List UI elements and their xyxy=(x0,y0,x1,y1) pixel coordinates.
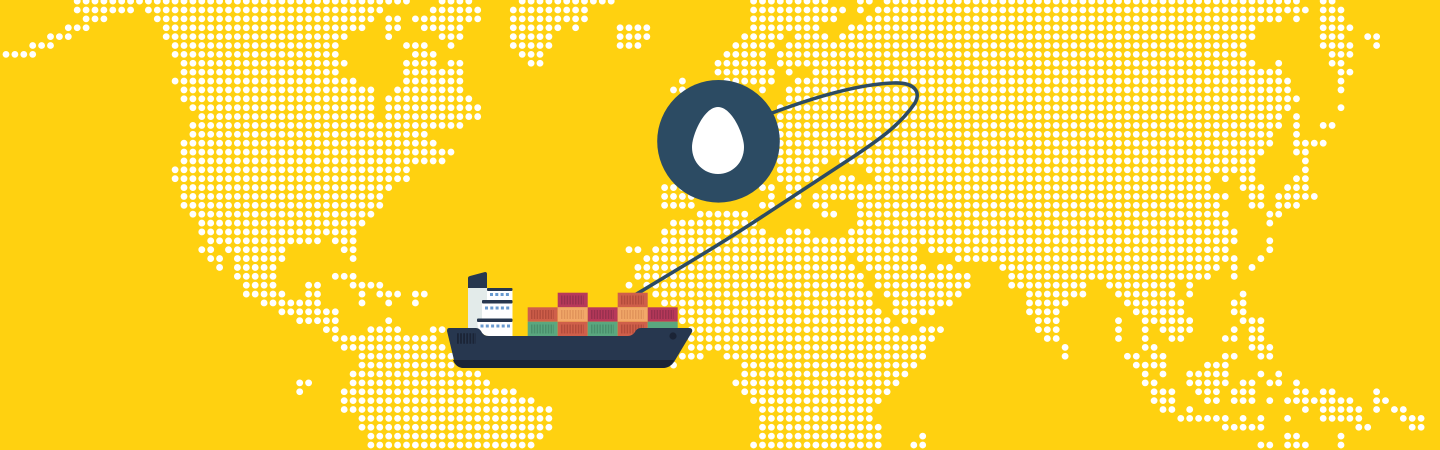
cargo ship xyxy=(447,272,692,368)
container stack: bottom row xyxy=(528,322,678,336)
container stack: top row xyxy=(558,293,648,307)
shipping containers xyxy=(528,293,678,336)
icon: oil drop badge xyxy=(657,80,780,203)
container stack: middle row xyxy=(528,307,678,322)
ship hull xyxy=(447,328,692,368)
route line xyxy=(630,83,917,298)
ship funnel xyxy=(468,272,487,329)
ship superstructure xyxy=(477,288,512,336)
